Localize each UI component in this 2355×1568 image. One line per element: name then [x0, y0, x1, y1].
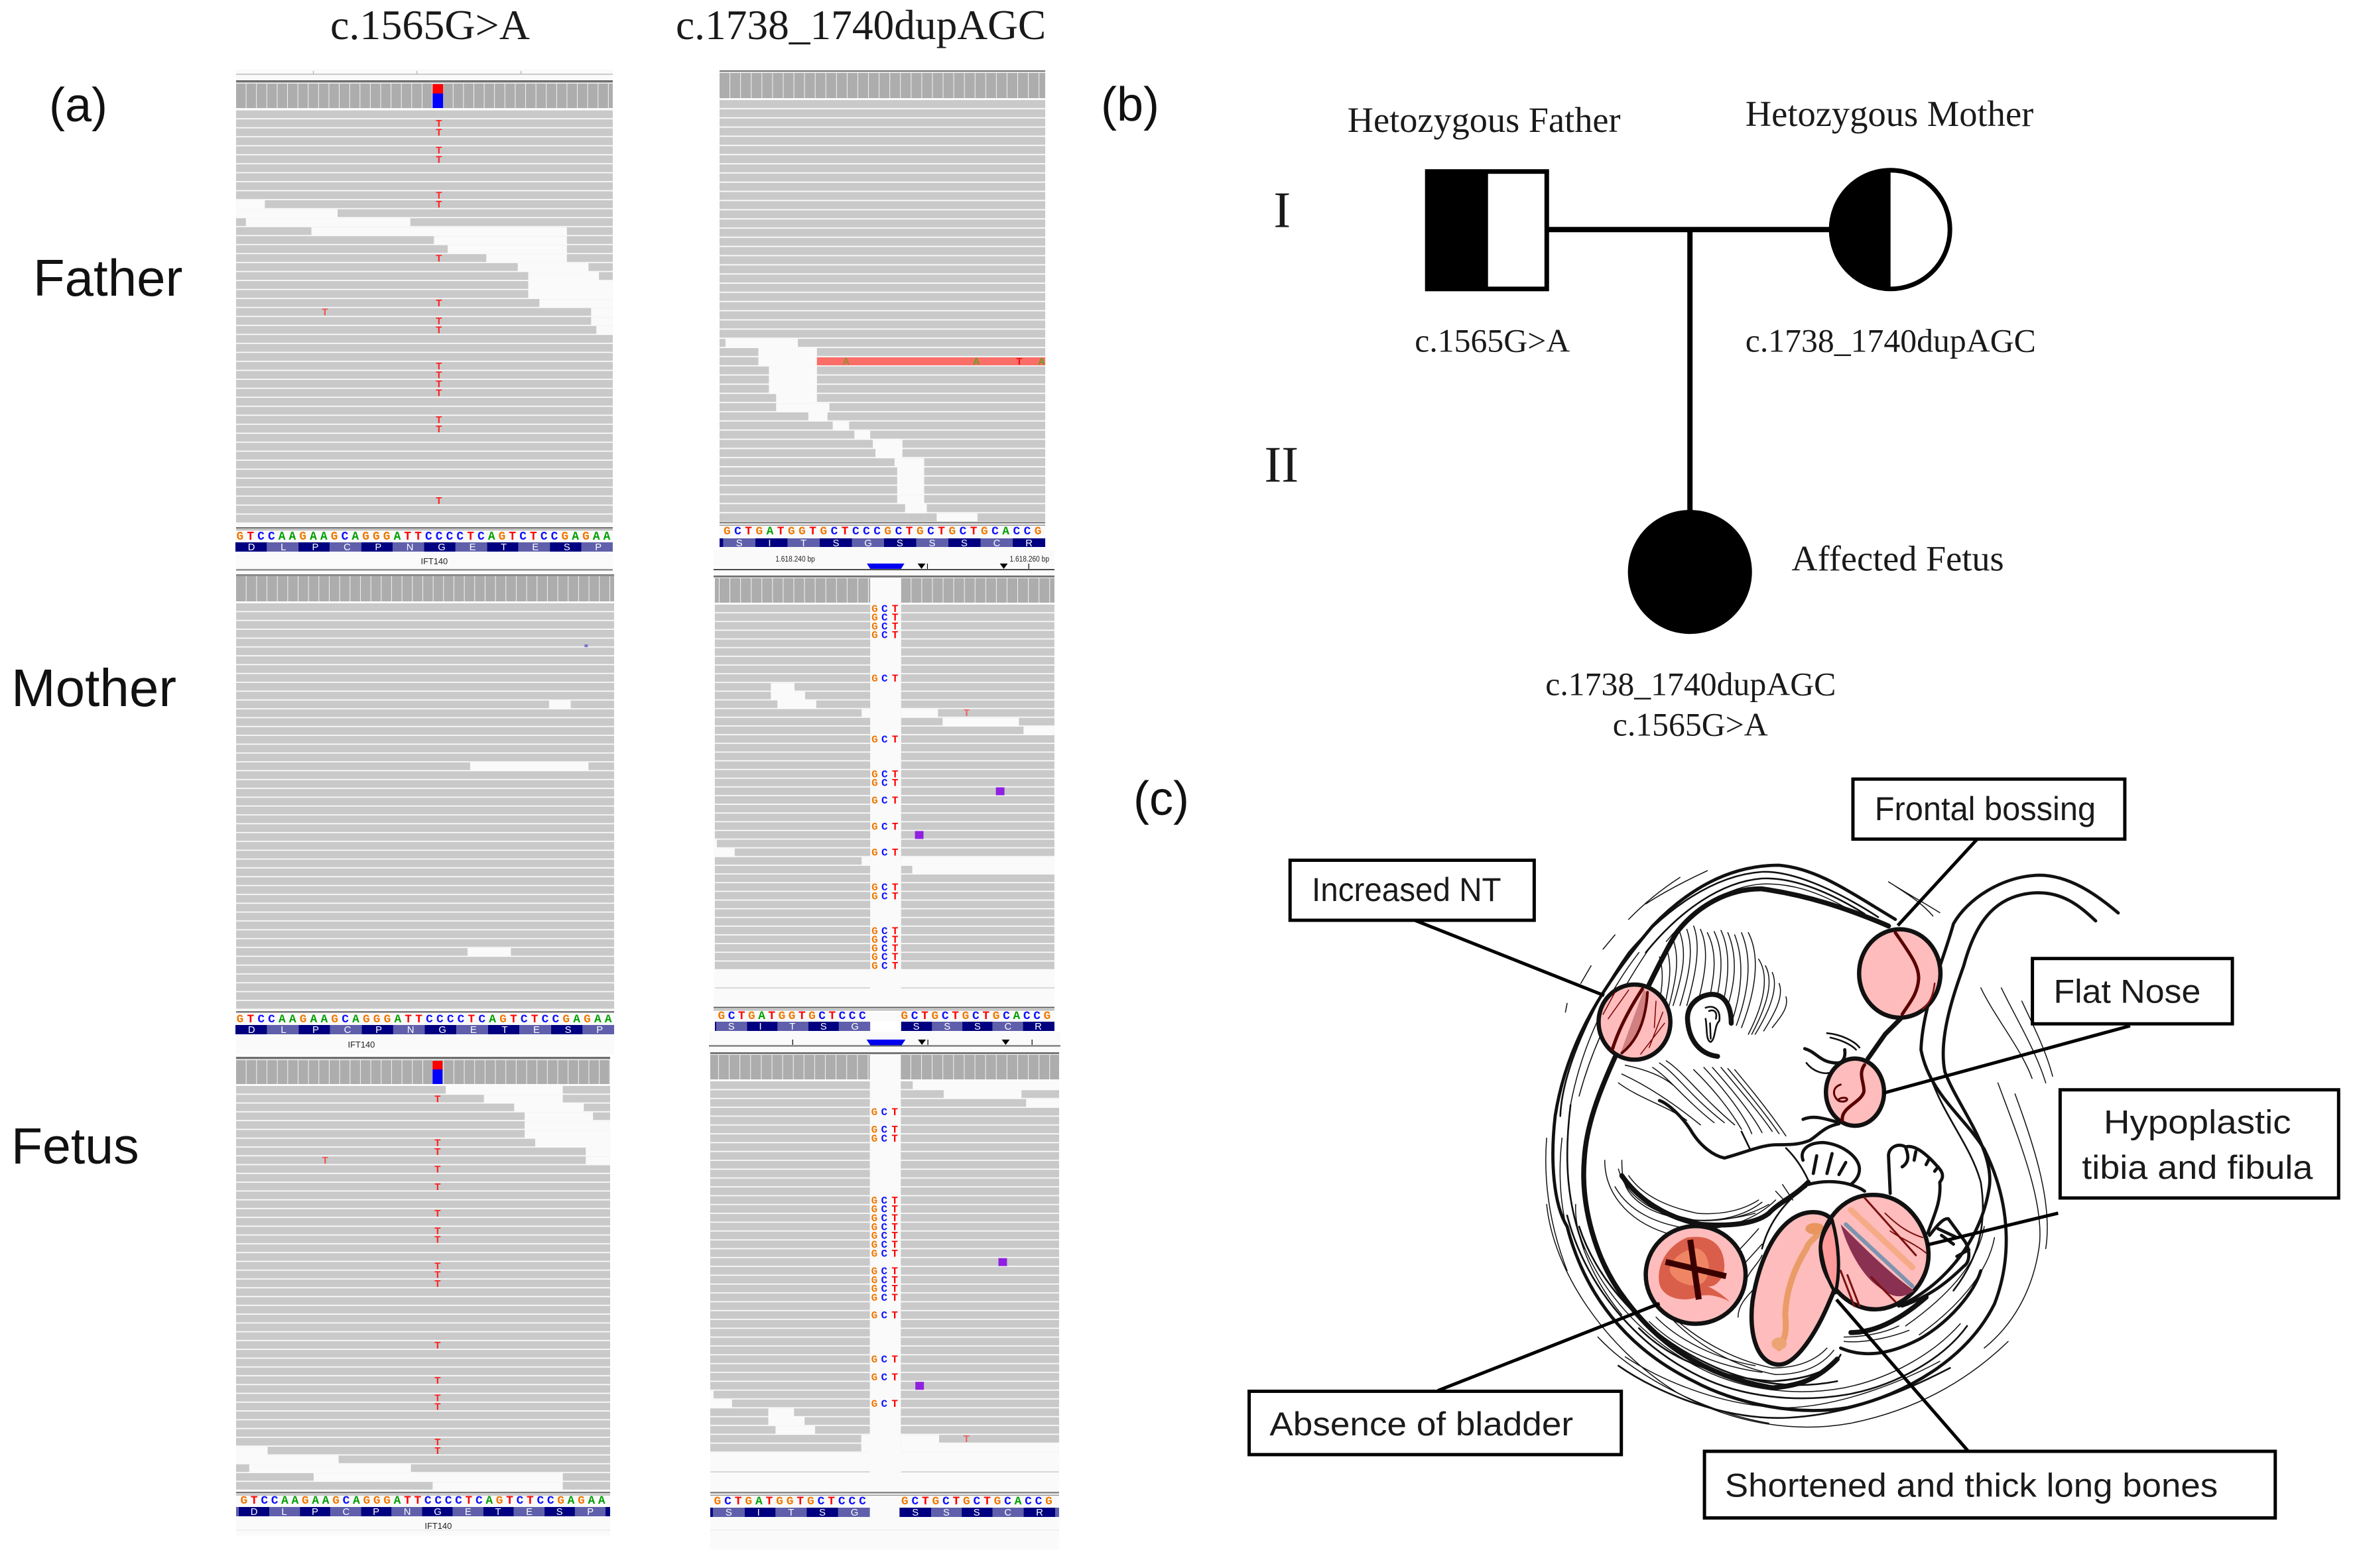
amino acid track: DLPCPNGETESP	[248, 1024, 603, 1036]
callout box: flat nose	[2033, 959, 2232, 1024]
reference sequence: GTCCAAGAAGCAGGGATTCCCCTCAGTCTCCGAGAA	[237, 530, 613, 544]
row label Mother: Mother	[11, 658, 176, 717]
amino acid track: DLPCPNGETESP	[248, 542, 602, 553]
row label Fetus: Fetus	[11, 1118, 139, 1175]
symbol: affected fetus	[1628, 510, 1752, 634]
aligned reads: TTTTTTTTTTTTTTTTTT	[892, 603, 899, 972]
highlight: frontal bossing	[1859, 930, 1941, 1018]
genome ruler: 1.618.240 bp / 1.618.260 bp: 1.618.240 bp	[775, 554, 815, 564]
symbol: heterozygous father	[1427, 172, 1547, 289]
callout box: hypoplastic tibia and fibula: tibia and fibula	[2082, 1149, 2313, 1186]
aligned reads: TTTTTTTTTTTTTTTTT	[436, 119, 442, 507]
panel: father c.1738_1740dupAGC reads	[720, 69, 1045, 550]
generation label II: II	[1264, 436, 1299, 493]
arm and hand	[1622, 1142, 1865, 1248]
panel: callouts	[1249, 779, 2338, 1518]
coverage track with duplication gap	[710, 1055, 1059, 1079]
aligned reads	[236, 110, 613, 522]
amino acid track: SITSGSSSCR	[736, 538, 1033, 549]
genome ruler: 1.618.240 bp / 1.618.260 bp: 1.618.260 bp	[1009, 554, 1049, 564]
label: Affected Fetus: Affected Fetus	[1791, 539, 2004, 579]
highlight: absence of bladder	[1646, 1226, 1746, 1324]
callout box: increased NT: Increased NT	[1312, 871, 1501, 908]
reference sequence, left of gap: GCTGATGGTGCTCCC	[714, 1495, 869, 1508]
reference sequence, right of gap: GCTGCTGCTGCACCG	[901, 1010, 1054, 1023]
label: Hetozygous Father: Hetozygous Father	[1348, 100, 1621, 140]
callout box: hypoplastic tibia and fibula: Hypoplastic	[2104, 1103, 2291, 1140]
aligned reads: GGGGGGGGGGGGGGGGGG	[871, 603, 878, 972]
aligned reads	[720, 100, 1045, 522]
fetus variants	[1545, 666, 1836, 743]
face profile	[1659, 1019, 1901, 1180]
callout line: absence of bladder	[1438, 1303, 1659, 1390]
mother variant: c.1738_1740dupAGC	[1746, 322, 2036, 359]
gene name: IFT140	[421, 556, 448, 566]
fetus variants: c.1738_1740dupAGC	[1545, 666, 1836, 703]
father variant: c.1565G>A	[1415, 322, 1570, 359]
generation label I: I	[1273, 181, 1291, 238]
callout box: frontal bossing: Frontal bossing	[1875, 790, 2096, 827]
amino acid track: SITSGSSSCR	[728, 1021, 1042, 1032]
fetus variants: c.1565G>A	[1613, 706, 1768, 743]
aligned reads: T	[322, 308, 328, 318]
row label Father: Father	[33, 249, 182, 307]
callout box: shortened and thick long bones: Shortened and thick long bones	[1725, 1467, 2218, 1504]
panel: fetus c.1565G>A reads	[236, 1055, 610, 1536]
reference sequence: GTCCAAGAAGCAGGGATTCCCCTCAGTCTCCGAGAA	[241, 1494, 608, 1508]
amino acid track: SITSGSSSCR	[726, 1507, 1043, 1518]
coverage track with red/blue variant bar	[236, 1060, 610, 1084]
coverage track	[236, 576, 614, 601]
coverage track with duplication gap	[715, 578, 1054, 603]
reference sequence, right of gap: GCTGCTGCTGCACCG	[901, 1495, 1056, 1508]
highlighted red read: A A T A	[843, 356, 1045, 367]
aligned reads	[236, 1086, 610, 1490]
head and back outline	[1584, 889, 1889, 1388]
insertion markers	[915, 788, 1005, 839]
connecting lines	[1547, 229, 1831, 511]
reference sequence, left of gap: GCTGATGGTGCTCCC	[718, 1010, 869, 1023]
highlight: increased NT	[1598, 985, 1671, 1059]
ear	[1687, 995, 1731, 1056]
callout box: absence of bladder	[1249, 1391, 1622, 1455]
callout box: flat nose: Flat Nose	[2053, 973, 2200, 1010]
panel: father c.1565G>A reads	[235, 69, 613, 572]
column heading: c.1565G>A: c.1565G>A	[330, 1, 530, 48]
highlight: shortened long bone	[1751, 1212, 1841, 1364]
gene name: IFT140	[424, 1521, 452, 1531]
aligned reads: GGGGGGGGGGGGGGGGGG	[871, 1107, 877, 1410]
panel: fetus c.1738_1740dupAGC reads	[710, 1052, 1059, 1549]
callout line: increased NT	[1415, 920, 1604, 995]
callout box: frontal bossing	[1853, 779, 2125, 839]
coverage track	[720, 73, 1045, 98]
callout line: hypoplastic tibia and fibula	[1927, 1213, 2058, 1245]
symbol: heterozygous mother	[1831, 170, 1950, 289]
aligned reads: CCCCCCCCCCCCCCCCCC	[881, 1107, 887, 1410]
callout box: hypoplastic tibia and fibula	[2060, 1090, 2338, 1198]
genome ruler between mother and fetus	[709, 1032, 1060, 1058]
gene name: IFT140	[348, 1040, 375, 1050]
aligned reads: CCCCCCCCCCCCCCCCCC	[881, 603, 888, 972]
panel: mother c.1565G>A reads	[235, 572, 615, 1054]
highlight: hypoplastic tibia and fibula	[1820, 1195, 1929, 1309]
panel label (b): (b)	[1101, 78, 1159, 131]
head hatching	[1605, 926, 1793, 1317]
callout box: increased NT	[1290, 860, 1534, 920]
column heading: c.1738_1740dupAGC: c.1738_1740dupAGC	[676, 2, 1046, 48]
callout box: shortened and thick long bones	[1704, 1451, 2275, 1518]
label: Hetozygous Mother: Hetozygous Mother	[1746, 93, 2033, 134]
amino acid track: DLPCPNGETESP	[251, 1506, 594, 1518]
panel: mother c.1738_1740dupAGC reads	[714, 570, 1054, 1032]
highlight: flat nose	[1826, 1059, 1884, 1126]
aligned reads	[236, 603, 614, 1009]
panel label (a): (a)	[49, 79, 107, 132]
aligned reads	[715, 603, 1054, 972]
aligned reads: TTTTTTTTTTTTTTTTTT	[891, 1107, 898, 1410]
reference sequence: GCTGATGGTGCTCCCGCTGCTGCTGCACCG	[724, 525, 1045, 538]
feet and legs	[1840, 1145, 1981, 1354]
aligned reads: T	[964, 707, 970, 719]
callout line: shortened and thick long bones	[1836, 1299, 1968, 1451]
callout box: absence of bladder: Absence of bladder	[1269, 1406, 1573, 1443]
aligned reads: T	[964, 1433, 970, 1445]
amniotic sac outlines	[1546, 865, 2118, 1427]
aligned reads: T	[322, 1155, 328, 1166]
reference sequence: GTCCAAGAAGCAGGGATTCCCCTCAGTCTCCGAGAA	[237, 1013, 615, 1026]
callout line: frontal bossing	[1898, 837, 1980, 926]
panel: pedigree	[1264, 93, 2036, 743]
coverage track with red/blue variant bar	[236, 84, 613, 108]
panel label (c): (c)	[1133, 772, 1189, 825]
panel: fetus illustration	[1546, 865, 2118, 1427]
insertion markers	[915, 1258, 1007, 1390]
aligned reads	[710, 1081, 1059, 1453]
genome ruler: 1.618.240 bp / 1.618.260 bp	[714, 550, 1054, 570]
callout line: flat nose	[1883, 1026, 2130, 1093]
aligned reads: TTTTTTTTTTTTTTTTT	[434, 1093, 440, 1457]
